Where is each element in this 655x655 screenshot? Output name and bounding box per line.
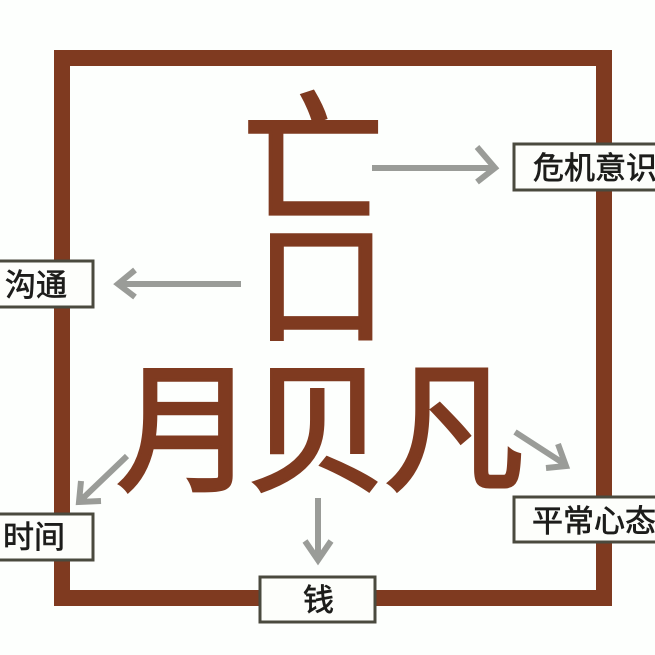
label box: 钱: 钱: [303, 583, 334, 618]
brown square frame: [62, 58, 604, 598]
large character component: 口: 口: [255, 213, 387, 360]
label box: 时间: [0, 514, 93, 560]
label box: 沟通: [0, 261, 93, 307]
large character component: 贝: 贝: [247, 353, 387, 510]
arrow to 沟通: [118, 270, 241, 297]
large character component: 月: 月: [116, 353, 256, 510]
large character component: 凡: 凡: [384, 352, 524, 509]
label box: 危机意识: 危机意识: [533, 151, 655, 186]
label box: 平常心态: [514, 497, 655, 542]
label box: 危机意识: [514, 144, 655, 190]
arrow to 钱: [305, 498, 331, 560]
label box: 沟通: 沟通: [5, 268, 67, 303]
arrow to 危机意识: [372, 147, 495, 182]
label box: 平常心态: 平常心态: [532, 504, 655, 539]
arrow to 时间: [79, 456, 127, 502]
arrow to 平常心态: [515, 432, 566, 468]
large character component: 亡: 亡: [242, 83, 384, 242]
label box: 时间: 时间: [3, 520, 65, 555]
label box: 钱: [260, 577, 375, 622]
